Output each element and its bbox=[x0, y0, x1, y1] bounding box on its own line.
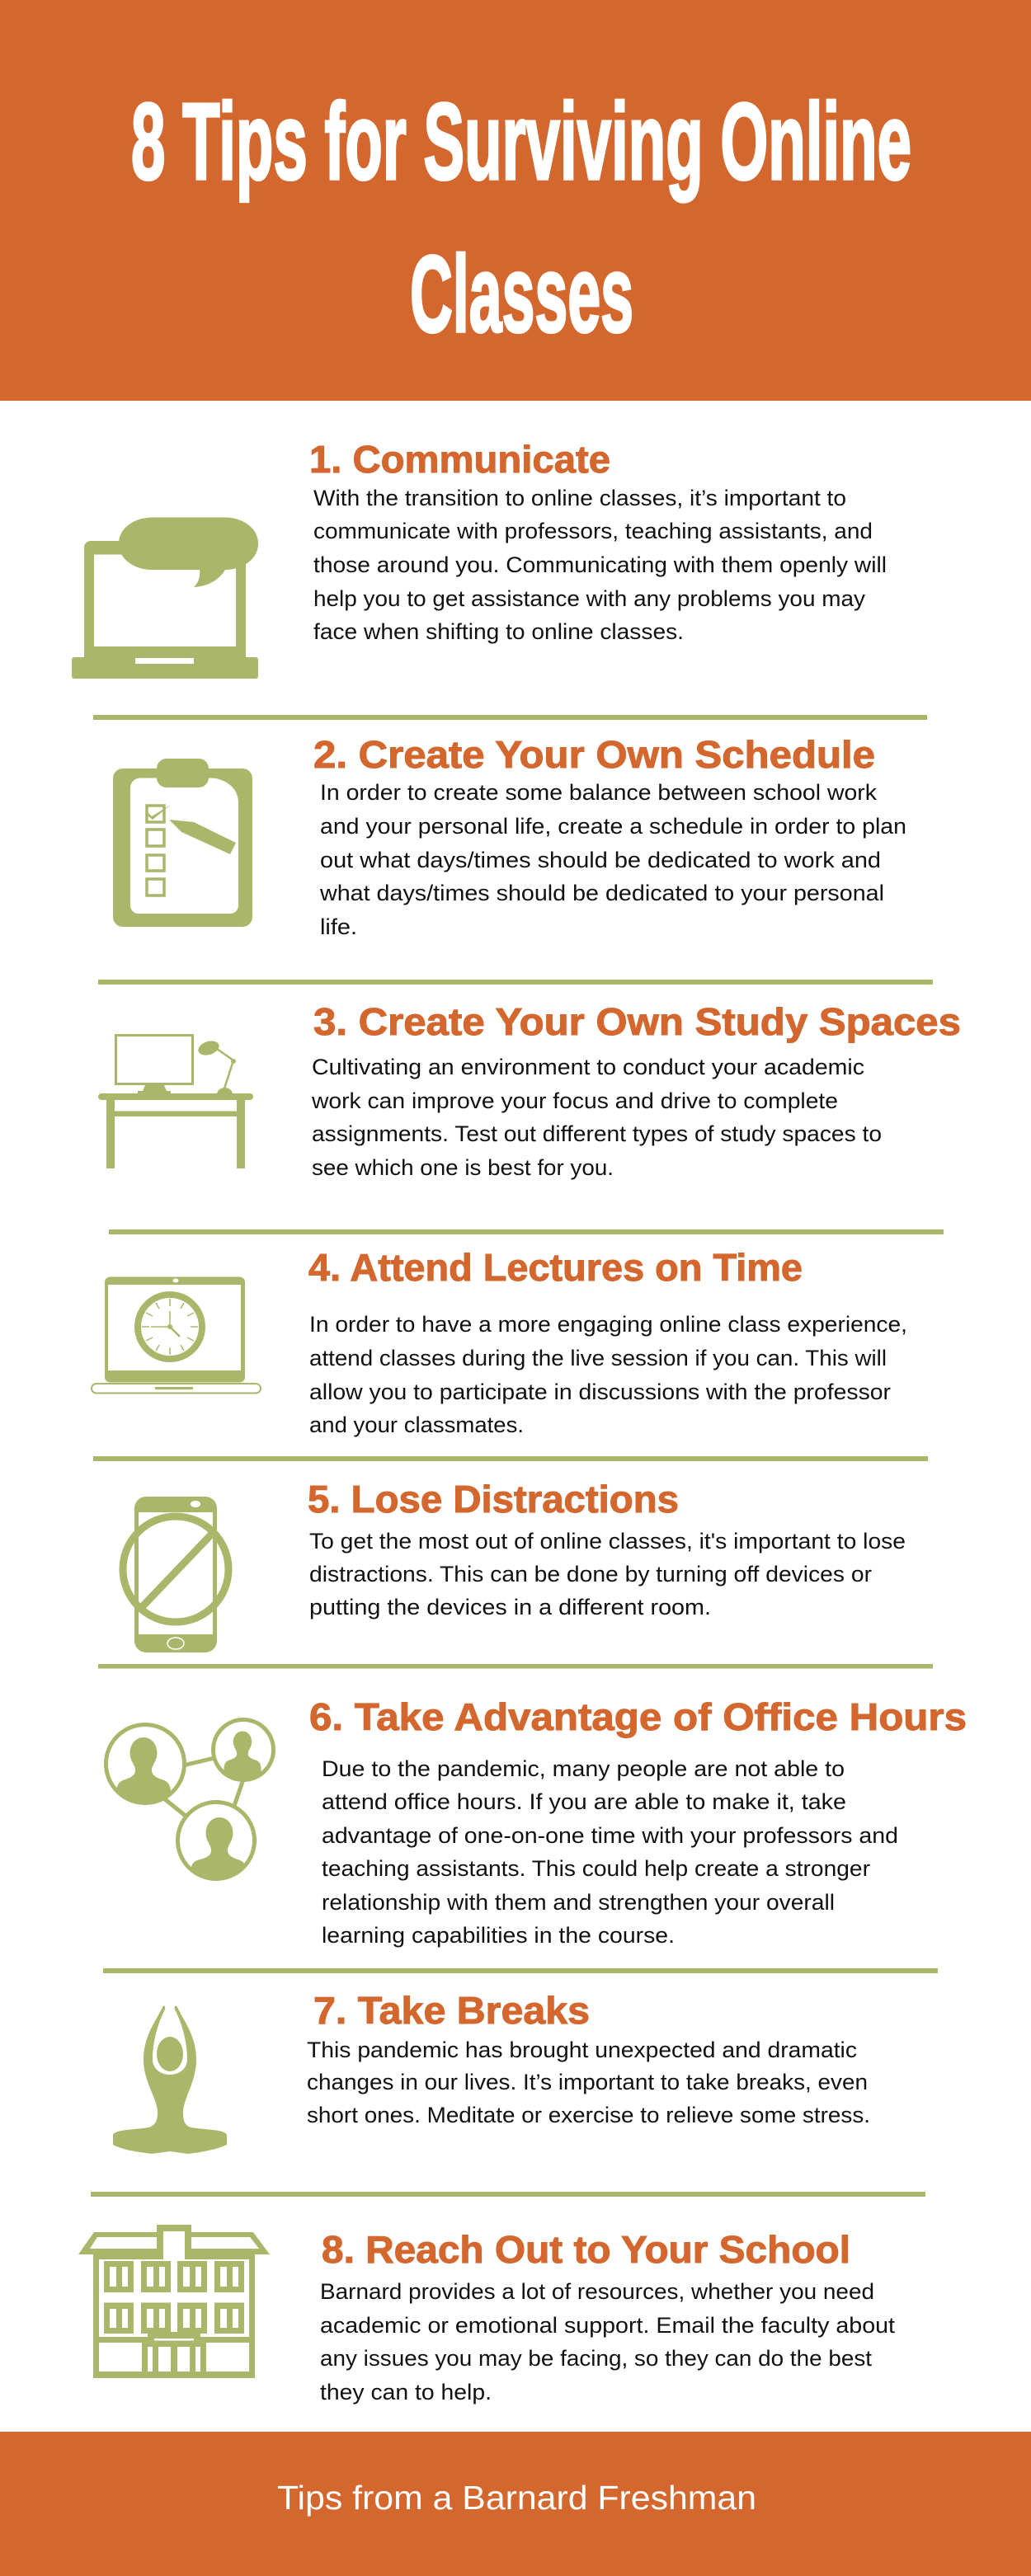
text block: out what days/times should be dedicated to work and bbox=[320, 848, 881, 872]
text block: allow you to participate in discussions with the professor bbox=[309, 1380, 891, 1404]
text block bbox=[319, 780, 906, 939]
panel: tip 4 lectures bbox=[92, 1246, 907, 1437]
panel: tip 3 study spaces bbox=[98, 1000, 961, 1180]
title: Classes bbox=[410, 233, 633, 355]
icon: school building bbox=[78, 2225, 270, 2378]
text block: attend classes during the live session if you can. This will bbox=[309, 1346, 887, 1370]
text block: and your classmates. bbox=[309, 1413, 524, 1437]
text block: academic or emotional support. Email the faculty about bbox=[320, 2313, 896, 2338]
text block: help you to get assistance with any problems you may bbox=[313, 586, 866, 611]
heading: 1. Communicate bbox=[309, 438, 610, 481]
heading: 3. Create Your Own Study Spaces bbox=[313, 1000, 961, 1043]
text block: face when shifting to online classes. bbox=[313, 619, 684, 644]
heading: 6. Take Advantage of Office Hours bbox=[309, 1695, 967, 1738]
title bbox=[131, 81, 911, 355]
text block: and your personal life, create a schedule in order to plan bbox=[320, 814, 906, 839]
text block: see which one is best for you. bbox=[312, 1155, 614, 1180]
heading: 7. Take Breaks bbox=[313, 1989, 590, 2032]
text block: With the transition to online classes, it’s important to bbox=[313, 486, 846, 510]
icon: laptop with speech bubble bbox=[72, 518, 258, 679]
text block: To get the most out of online classes, it's important to lose bbox=[309, 1529, 906, 1554]
text block: putting the devices in a different room. bbox=[309, 1595, 711, 1619]
text block: Cultivating an environment to conduct your academic bbox=[312, 1055, 864, 1079]
panel: tip 6 office hours bbox=[106, 1695, 967, 1948]
heading: 4. Attend Lectures on Time bbox=[308, 1246, 803, 1289]
panel: tip 1 communicate bbox=[72, 438, 887, 679]
text block: In order to have a more engaging online class experience, bbox=[309, 1312, 907, 1337]
text block: any issues you may be facing, so they can do the best bbox=[320, 2346, 873, 2371]
text block: they can to help. bbox=[320, 2380, 492, 2404]
text block: Barnard provides a lot of resources, whether you need bbox=[320, 2279, 874, 2304]
text block: assignments. Test out different types of study spaces to bbox=[312, 1121, 882, 1146]
panel: tip 2 schedule bbox=[113, 733, 906, 939]
text block bbox=[313, 486, 887, 644]
text block: changes in our lives. It’s important to take breaks, even bbox=[307, 2070, 868, 2094]
panel: tip 7 breaks bbox=[113, 1989, 870, 2154]
icon: laptop with clock bbox=[92, 1276, 261, 1394]
text block bbox=[322, 1756, 898, 1948]
text block: life. bbox=[320, 914, 357, 939]
footer text: Tips from a Barnard Freshman bbox=[277, 2479, 756, 2517]
icon: clipboard checklist bbox=[113, 759, 252, 927]
header band with title bbox=[0, 0, 1031, 401]
text block: relationship with them and strengthen your overall bbox=[322, 1890, 835, 1915]
heading: 8. Reach Out to Your School bbox=[322, 2228, 850, 2271]
text block bbox=[320, 2279, 896, 2404]
text block: communicate with professors, teaching assistants, and bbox=[313, 519, 873, 543]
text block: Due to the pandemic, many people are not able to bbox=[322, 1756, 845, 1781]
footer band bbox=[0, 2432, 1031, 2576]
text block: In order to create some balance between school work bbox=[320, 780, 878, 805]
text block bbox=[309, 1529, 906, 1619]
text block: teaching assistants. This could help create a stronger bbox=[322, 1856, 870, 1881]
icon: phone with prohibition sign bbox=[123, 1497, 228, 1652]
text block: learning capabilities in the course. bbox=[322, 1923, 675, 1948]
text block bbox=[309, 1312, 907, 1437]
icon: connected people bbox=[106, 1720, 274, 1892]
text block: attend office hours. If you are able to make it, take bbox=[322, 1789, 846, 1814]
heading: 2. Create Your Own Schedule bbox=[313, 733, 875, 776]
panel: tip 8 reach out bbox=[78, 2225, 896, 2404]
panel: tip 5 distractions bbox=[123, 1478, 906, 1652]
icon: meditating figure bbox=[113, 2006, 227, 2154]
text block: distractions. This can be done by turning off devices or bbox=[309, 1562, 872, 1586]
text block: what days/times should be dedicated to your personal bbox=[319, 881, 884, 905]
heading: 5. Lose Distractions bbox=[308, 1478, 679, 1521]
text block: those around you. Communicating with them openly will bbox=[313, 552, 887, 577]
text block: short ones. Meditate or exercise to relieve some stress. bbox=[307, 2103, 870, 2127]
icon: desk with monitor and lamp bbox=[98, 1036, 253, 1168]
text block bbox=[307, 2038, 870, 2127]
text block bbox=[311, 1055, 882, 1180]
text block: work can improve your focus and drive to complete bbox=[311, 1088, 838, 1113]
text block: advantage of one-on-one time with your professors and bbox=[322, 1823, 898, 1848]
text block: This pandemic has brought unexpected and dramatic bbox=[307, 2038, 857, 2062]
